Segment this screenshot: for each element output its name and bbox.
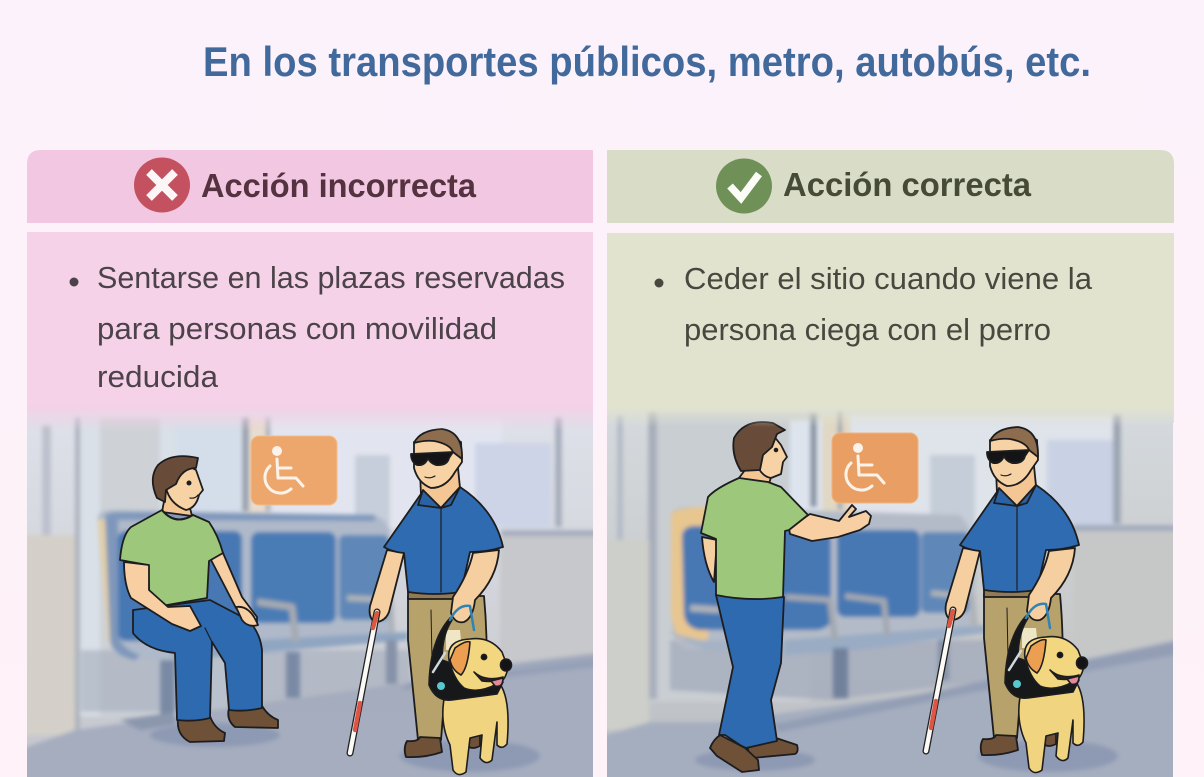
heading: acción correcta: Acción correcta bbox=[783, 166, 1032, 203]
guide dog bbox=[1005, 604, 1088, 773]
text block: correcta: Ceder el sitio cuando viene la bbox=[684, 261, 1093, 296]
icon: green check bbox=[716, 158, 772, 214]
background: train interior bbox=[595, 405, 1185, 777]
icon: red cross bbox=[134, 158, 190, 212]
heading: acción incorrecta: Acción incorrecta bbox=[201, 167, 477, 204]
text block: correcta bbox=[654, 261, 1093, 347]
body background: correcta bbox=[607, 233, 1174, 423]
text block: correcta: persona ciega con el perro bbox=[684, 312, 1051, 347]
header band: correcta bbox=[607, 150, 1174, 223]
person: standing man from behind bbox=[701, 422, 871, 772]
white cane bbox=[350, 612, 377, 753]
person: blind man bbox=[370, 429, 503, 757]
text block: incorrecta bbox=[70, 260, 565, 394]
text block: incorrecta: reducida bbox=[97, 359, 219, 394]
header band: incorrecta bbox=[27, 150, 593, 223]
white cane bbox=[926, 610, 953, 751]
text block: incorrecta: Sentarse en las plazas reservadas bbox=[97, 260, 565, 295]
body background: incorrecta bbox=[27, 232, 593, 422]
person: seated man bbox=[120, 456, 278, 742]
text block: incorrecta: para personas con movilidad bbox=[97, 311, 497, 346]
person: blind man bbox=[946, 427, 1079, 755]
title: En los transportes públicos, metro, autobús, etc. bbox=[203, 38, 1091, 85]
panel: acción incorrecta bbox=[15, 150, 605, 777]
fade: panel into illustration bbox=[27, 405, 593, 431]
illustration: man offering the seat bbox=[595, 405, 1185, 777]
bench seats bbox=[667, 507, 985, 698]
guide dog bbox=[429, 606, 512, 775]
bench seats bbox=[98, 510, 408, 730]
illustration: man sitting in reserved seat bbox=[15, 405, 605, 777]
fade: panel into illustration bbox=[607, 405, 1174, 427]
background: train interior bbox=[15, 405, 605, 777]
sign: wheelchair symbol bbox=[832, 433, 918, 503]
panel: acción correcta bbox=[595, 150, 1185, 777]
sign: wheelchair symbol bbox=[251, 436, 337, 505]
